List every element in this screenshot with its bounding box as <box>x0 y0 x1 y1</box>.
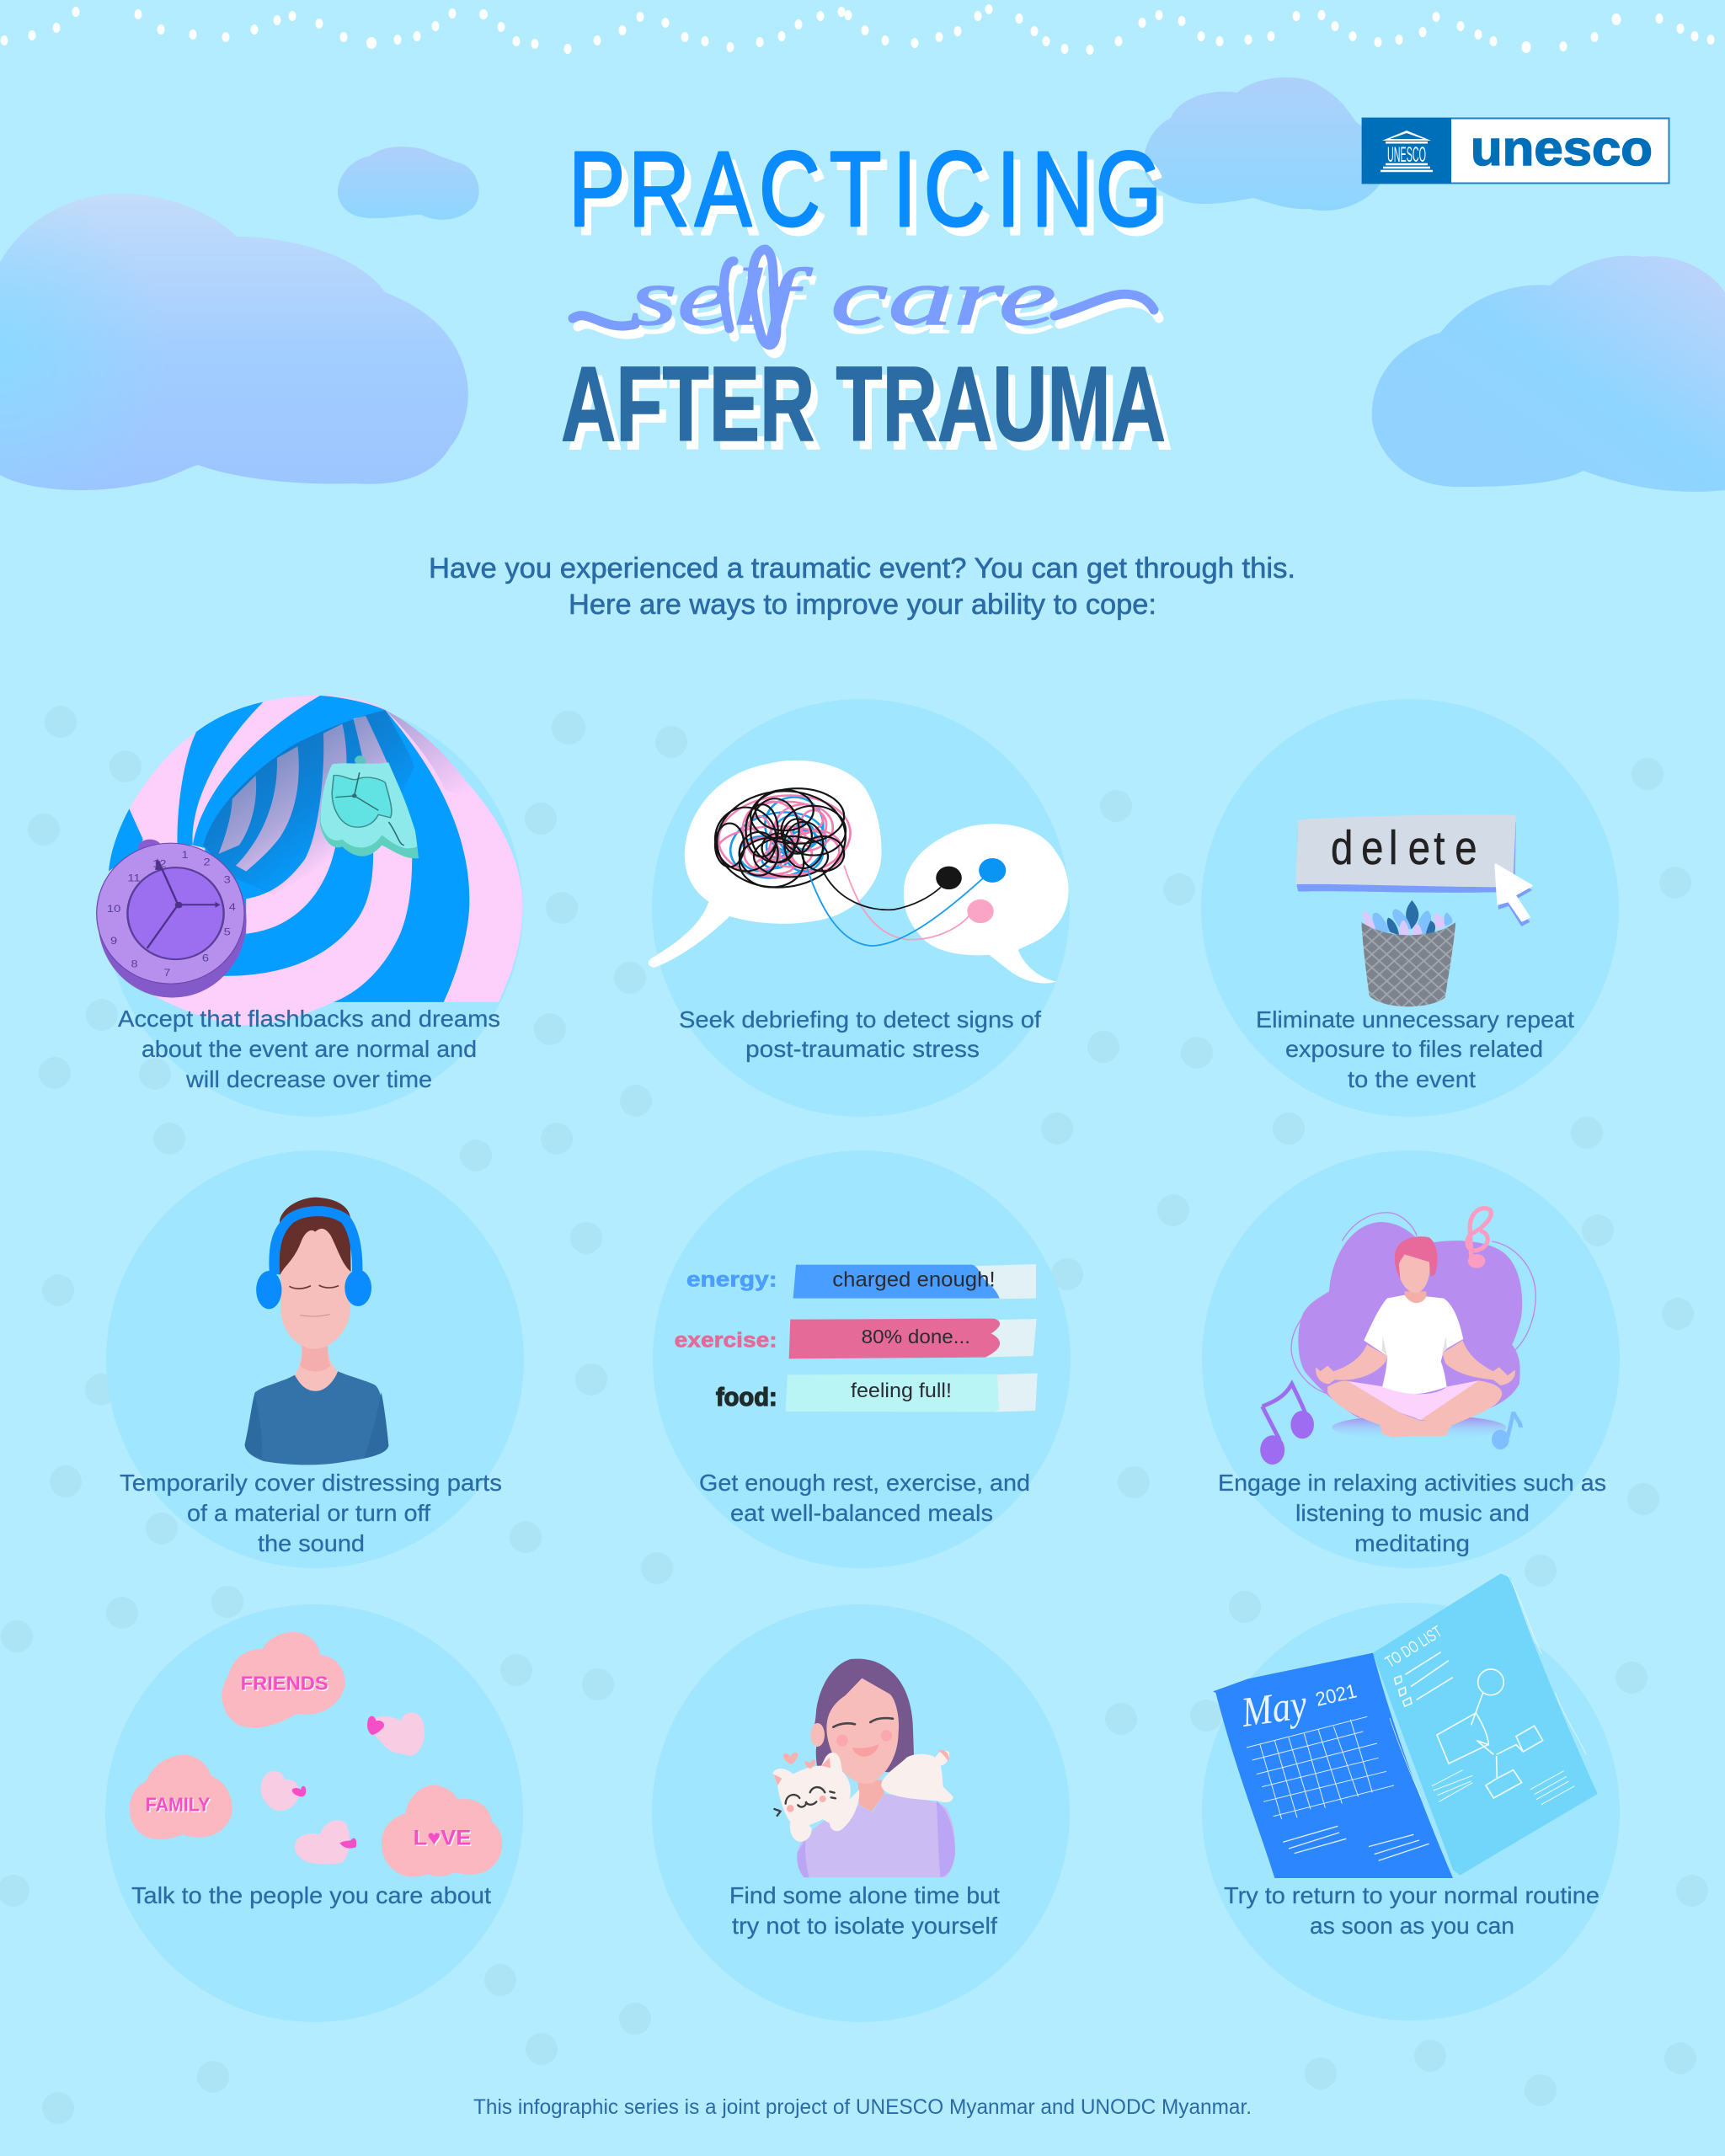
caption: Accept that flashbacks and dreams <box>118 1006 500 1032</box>
icon: pink treble clef <box>1467 1209 1491 1268</box>
caption <box>1256 1006 1574 1092</box>
title: PRACTICING <box>575 139 1168 258</box>
illustration: delete button and bin <box>1296 814 1532 1006</box>
UNESCO logo <box>1362 118 1669 184</box>
caption: Temporarily cover distressing parts <box>120 1470 502 1496</box>
illustration: person with headphones <box>245 1198 388 1465</box>
illustration: meditating person with music notes <box>1260 1209 1535 1465</box>
caption <box>118 1006 500 1092</box>
illustration: open planner: 2021 <box>1313 1679 1359 1710</box>
to-do page: TO DO LIST <box>1382 1623 1445 1672</box>
caption: Talk to the people you care about <box>131 1882 491 1908</box>
caption <box>699 1470 1030 1526</box>
panel: debriefing <box>649 699 1070 1117</box>
caption: listening to music and <box>1295 1500 1530 1526</box>
title: self <box>633 260 816 350</box>
title <box>561 131 1172 472</box>
decorative string of white dots <box>0 4 1715 55</box>
illustration: pink clouds and hearts: FRIENDS <box>242 1673 329 1695</box>
panel: eliminate exposure <box>1201 699 1619 1117</box>
illustration: speech bubbles with tangled thoughts <box>649 760 1069 983</box>
icon: purple pocket clock: 10 <box>107 903 121 915</box>
illustration: status bars: charged enough! <box>832 1268 996 1291</box>
caption: about the event are normal and <box>142 1036 477 1062</box>
caption: meditating <box>1354 1530 1470 1556</box>
icon: purple pocket clock: 11 <box>127 873 141 883</box>
illustration: status bars: feeling full! <box>851 1380 952 1402</box>
icon: purple pocket clock: 7 <box>163 967 170 979</box>
panel: flashbacks and dreams <box>97 696 523 1117</box>
caption: post-traumatic stress <box>745 1036 980 1062</box>
caption <box>1224 1882 1599 1939</box>
caption: Seek debriefing to detect signs of <box>679 1006 1041 1033</box>
illustration: open planner <box>1213 1573 1598 1878</box>
icon: purple pocket clock: 12 <box>152 857 167 869</box>
caption: as soon as you can <box>1310 1913 1514 1939</box>
title: AFTER TRAUMA <box>568 353 1172 472</box>
icon: double music note <box>1260 1384 1314 1465</box>
intro text <box>429 552 1295 621</box>
title: self <box>630 252 813 342</box>
caption: try not to isolate yourself <box>732 1913 997 1939</box>
illustration: delete button and bin: delete <box>1331 822 1477 875</box>
title: care <box>834 260 1060 350</box>
caption <box>1218 1470 1606 1556</box>
icon: purple pocket clock: 2 <box>204 857 211 867</box>
figure <box>1316 1236 1515 1438</box>
footer credit: This infographic series is a joint project of UNESCO Myanmar and UNODC Myanmar. <box>473 2095 1252 2119</box>
icon: purple pocket clock: 9 <box>110 935 117 947</box>
caption: the sound <box>258 1530 365 1556</box>
icon: purple pocket clock: 8 <box>131 958 138 969</box>
icon: purple pocket clock <box>97 840 247 998</box>
icon: purple pocket clock: 6 <box>202 953 209 963</box>
UNESCO logo: UNESCO <box>1387 143 1426 167</box>
panel: alone time <box>652 1604 1070 2022</box>
coloured dots <box>936 858 1006 923</box>
background faint dots <box>0 706 1708 2124</box>
illustration: spiral tunnel with clocks <box>97 696 523 1025</box>
cloud: large right <box>1372 256 1725 492</box>
illustration: pink clouds and hearts <box>130 1632 502 1876</box>
UNESCO logo: unesco <box>1471 121 1653 176</box>
illustration: pink clouds and hearts: FRIENDS <box>241 1673 328 1694</box>
panel: rest, exercise and meals <box>653 1150 1071 1568</box>
panel: talk to people <box>105 1604 523 2022</box>
title: AFTER TRAUMA <box>561 344 1166 463</box>
title: PRACTICING <box>569 131 1162 249</box>
caption: Eliminate unnecessary repeat <box>1256 1006 1574 1033</box>
intro text: Have you experienced a traumatic event? You can get through this. <box>429 552 1295 584</box>
caption <box>729 1882 1000 1939</box>
illustration: pink clouds and hearts: FAMILY <box>146 1794 210 1816</box>
illustration: open planner: May <box>1238 1680 1310 1736</box>
caption <box>679 1006 1041 1062</box>
icon: waste basket <box>1361 900 1455 1006</box>
icon: cat <box>772 1750 953 1842</box>
illustration: pink clouds and hearts: FAMILY <box>147 1795 211 1817</box>
calendar page <box>1247 1716 1429 1860</box>
caption: of a material or turn off <box>187 1500 430 1526</box>
title: care <box>830 252 1056 342</box>
caption: will decrease over time <box>185 1066 432 1092</box>
caption: Engage in relaxing activities such as <box>1218 1470 1606 1496</box>
caption: eat well-balanced meals <box>730 1500 993 1526</box>
icon: blue music note <box>1492 1412 1520 1449</box>
illustration: pink clouds and hearts: L♥VE <box>414 1827 471 1850</box>
caption <box>120 1470 502 1556</box>
caption: Find some alone time but <box>729 1882 1000 1908</box>
icon: purple pocket clock: 5 <box>224 926 231 937</box>
caption: exposure to files related <box>1285 1036 1543 1062</box>
caption: to the event <box>1348 1066 1476 1092</box>
panel: cover distressing parts <box>106 1150 524 1568</box>
caption: Get enough rest, exercise, and <box>699 1470 1030 1496</box>
illustration: status bars: energy: <box>686 1268 777 1291</box>
illustration: status bars: food: <box>716 1383 777 1412</box>
illustration: status bars <box>675 1264 1038 1412</box>
icon: purple pocket clock: 3 <box>224 873 231 885</box>
icon: scribble <box>710 784 855 894</box>
icon: purple pocket clock: 1 <box>181 849 189 861</box>
icon: purple pocket clock: 4 <box>229 901 236 913</box>
caption: Try to return to your normal routine <box>1224 1882 1599 1908</box>
illustration: pink clouds and hearts: L♥VE <box>414 1828 473 1851</box>
cloud: small left <box>338 147 479 220</box>
illustration: status bars: 80% done... <box>862 1326 970 1348</box>
connecting lines <box>807 866 983 946</box>
panel: normal routine <box>1202 1573 1620 2020</box>
intro text: Here are ways to improve your ability to cope: <box>569 589 1156 621</box>
cloud: top right <box>1144 77 1384 211</box>
panel: relaxing activities <box>1202 1150 1620 1568</box>
icon: melted teal clock <box>320 755 419 858</box>
illustration: person with cat <box>772 1659 955 1877</box>
cloud: large left <box>0 194 468 490</box>
illustration: status bars: exercise: <box>675 1328 777 1352</box>
